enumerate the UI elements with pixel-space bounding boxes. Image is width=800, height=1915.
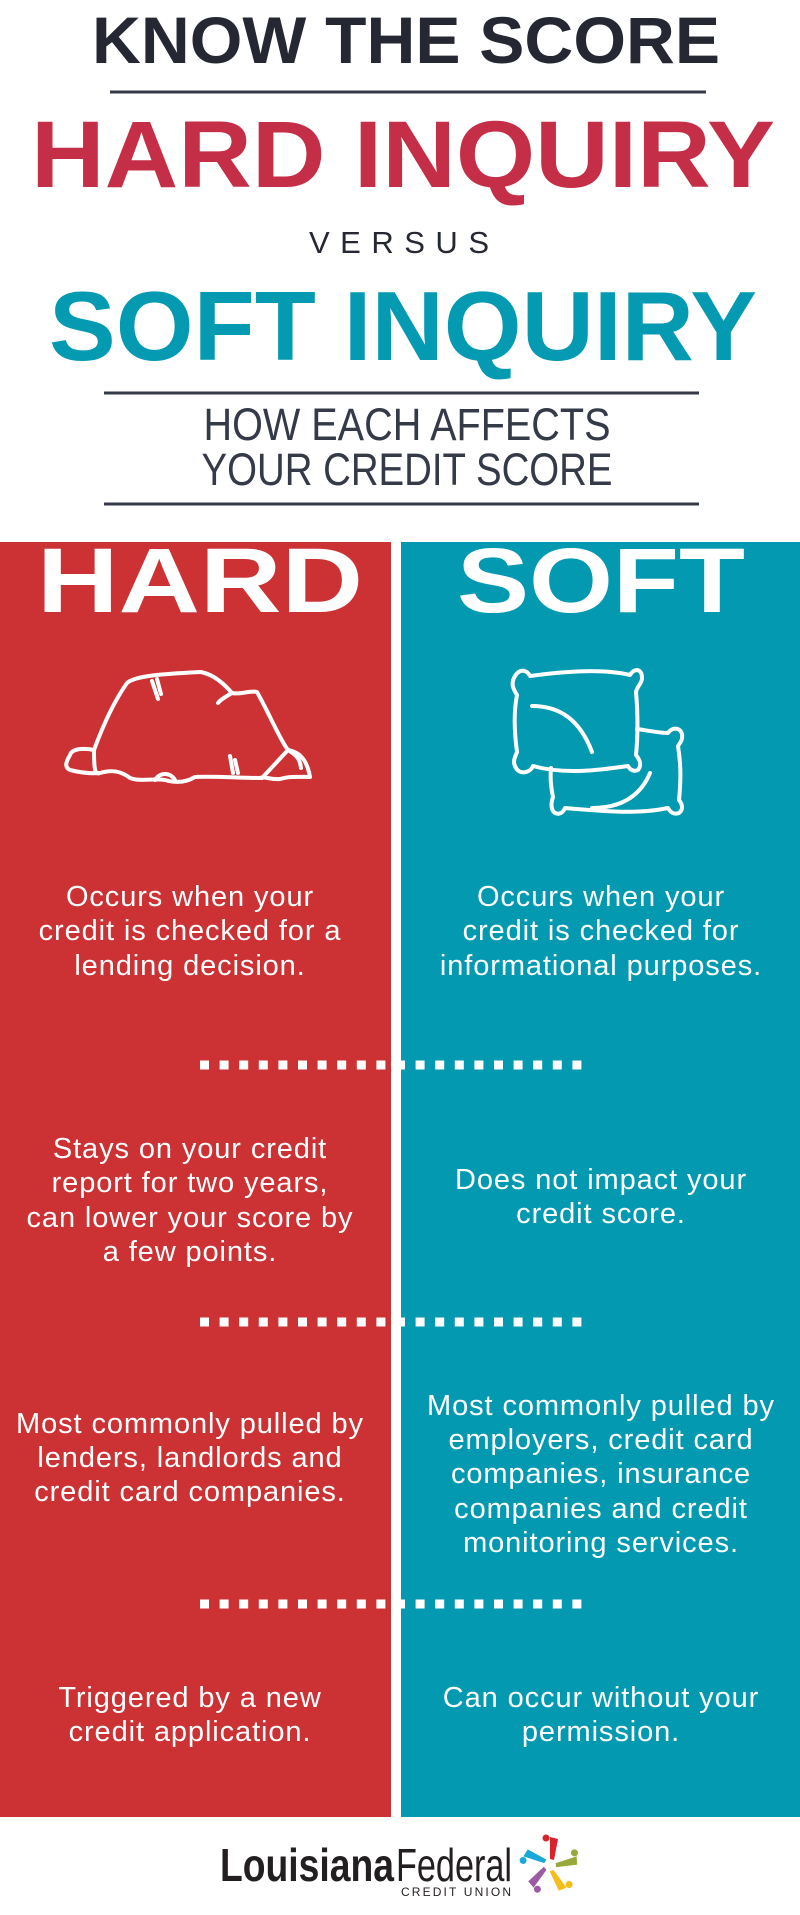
text: hard 3: credit card companies. (34, 1476, 346, 1508)
subtitle: HOW EACH AFFECTS (204, 399, 610, 450)
text: soft 4: permission. (522, 1716, 680, 1748)
text: hard 1: Occurs when your (66, 881, 314, 913)
text: versus: VERSUS (309, 225, 489, 260)
text: hard 2 (27, 1133, 353, 1268)
text: soft 1 (440, 881, 762, 982)
icon: pillows (513, 670, 682, 814)
text: soft 3: employers, credit card (448, 1424, 754, 1456)
text: hard 3: Most commonly pulled by (16, 1408, 364, 1440)
heading: soft inquiry: SOFT INQUIRY (49, 271, 757, 381)
logo: CREDIT UNION (401, 1885, 511, 1899)
logo: Federal (396, 1839, 512, 1891)
text: soft 4: Can occur without your (443, 1682, 759, 1714)
text: hard 4: Triggered by a new (58, 1682, 322, 1714)
text: soft 3: companies, insurance (451, 1458, 751, 1490)
text: soft 3 (427, 1390, 775, 1559)
text: hard 4 (58, 1682, 322, 1748)
text: hard 2: Stays on your credit (53, 1133, 327, 1165)
icon: rock (66, 672, 310, 782)
text: soft 2 (455, 1164, 747, 1230)
text: hard 1 (39, 881, 341, 982)
text: soft 1: informational purposes. (440, 950, 762, 982)
text: soft 3: Most commonly pulled by (427, 1390, 775, 1422)
logo: Louisiana (220, 1839, 394, 1891)
text: soft 2: credit score. (516, 1198, 686, 1230)
text: soft 3: companies and credit (454, 1493, 748, 1525)
heading: HARD: HARD (37, 530, 363, 632)
text: soft 1: Occurs when your (477, 881, 725, 913)
subtitle (202, 399, 612, 495)
text: hard 3 (16, 1408, 364, 1508)
text: soft 3: monitoring services. (463, 1527, 739, 1559)
text: hard 3: lenders, landlords and (37, 1442, 343, 1474)
text: soft 4 (443, 1682, 759, 1748)
title: know the score: KNOW THE SCORE (92, 3, 720, 77)
text: hard 2: a few points. (103, 1236, 277, 1268)
text: hard 4: credit application. (69, 1716, 311, 1748)
panel: hard (0, 530, 391, 1817)
heading: hard inquiry: HARD INQUIRY (31, 102, 775, 208)
heading: SOFT: SOFT (457, 530, 745, 632)
text: soft 1: credit is checked for (463, 915, 739, 947)
logo (220, 1834, 581, 1899)
text: soft 2: Does not impact your (455, 1164, 747, 1196)
text: hard 1: lending decision. (74, 950, 306, 982)
text: hard 1: credit is checked for a (39, 915, 341, 947)
panel: soft (401, 530, 800, 1817)
icon: people pinwheel (519, 1834, 581, 1894)
text: hard 2: report for two years, (52, 1167, 328, 1199)
subtitle: YOUR CREDIT SCORE (202, 444, 612, 495)
text: hard 2: can lower your score by (27, 1202, 353, 1234)
